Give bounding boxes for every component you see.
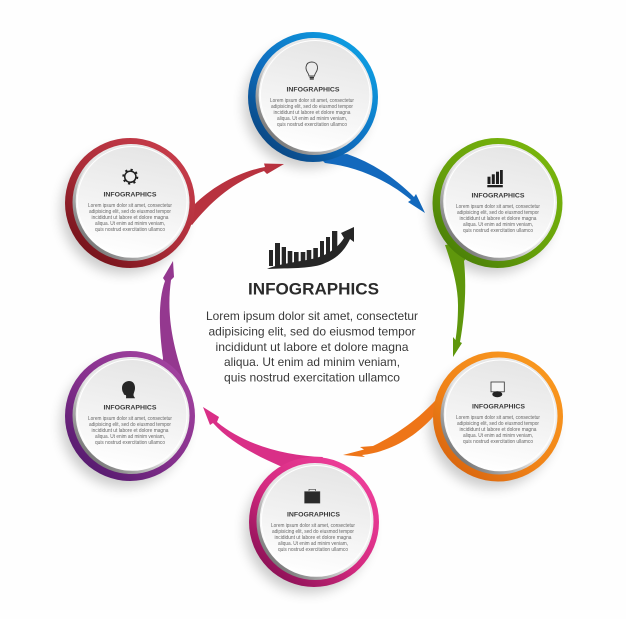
disc face: [260, 464, 373, 577]
disc face: [259, 39, 372, 152]
disc shadow crescent: [72, 144, 190, 261]
panel: blue lightbulb step: [244, 32, 425, 213]
panel: green bars step: [428, 138, 562, 357]
ring: [432, 138, 562, 268]
text block: adipisicing elit, sed do eiusmod tempor: [89, 422, 171, 428]
text block: quis nostrud exercitation ullamco: [95, 440, 165, 446]
text block: quis nostrud exercitation ullamco: [224, 370, 400, 384]
disc highlight arc: [77, 360, 187, 469]
text block: incididunt ut labore et dolore magna: [460, 427, 537, 433]
text block: quis nostrud exercitation ullamco: [463, 439, 533, 445]
text block: aliqua. Ut enim ad minim veniam,: [95, 221, 165, 227]
ring: [65, 351, 195, 481]
text block: quis nostrud exercitation ullamco: [95, 227, 165, 233]
text block: adipisicing elit, sed do eiusmod tempor: [208, 324, 416, 338]
disc face: [443, 145, 556, 258]
disc shadow crescent: [256, 38, 372, 155]
text block: aliqua. Ut enim ad minim veniam,: [463, 222, 533, 228]
arrow: green to orange: [445, 240, 480, 357]
arrow: blue to green: [318, 154, 425, 213]
disc highlight arc: [260, 41, 370, 150]
arrow: red to blue: [175, 164, 284, 225]
text block: incididunt ut labore et dolore magna: [216, 340, 409, 354]
text block: adipisicing elit, sed do eiusmod tempor: [272, 529, 354, 535]
disc shadow crescent: [72, 357, 190, 474]
arrow: pink to purple: [203, 407, 323, 475]
text block: [270, 98, 354, 128]
disc shadow crescent: [440, 358, 558, 474]
disc face: [444, 358, 557, 471]
panel: red gear step: [61, 138, 284, 274]
text block: incididunt ut labore et dolore magna: [274, 535, 352, 541]
panel: orange monitor step: [343, 352, 563, 488]
text block: Lorem ipsum dolor sit amet, consectetur: [88, 416, 172, 422]
icon: bar chart: [487, 170, 503, 187]
ring: [65, 138, 195, 268]
disc face: [76, 145, 189, 258]
arrow: purple to red: [160, 261, 187, 387]
icon: briefcase: [304, 489, 320, 503]
panel: pink briefcase step: [203, 407, 379, 593]
ring: [433, 352, 563, 482]
icon: gear: [123, 170, 137, 184]
text block: [456, 204, 540, 234]
text block: adipisicing elit, sed do eiusmod tempor: [89, 209, 171, 215]
text block: adipisicing elit, sed do eiusmod tempor: [271, 104, 353, 110]
text block: incididunt ut labore et dolore magna: [92, 215, 169, 221]
text block: [271, 523, 355, 553]
heading: INFOGRAPHICS: [286, 86, 340, 94]
text block: aliqua. Ut enim ad minim veniam,: [463, 433, 533, 439]
heading: INFOGRAPHICS: [472, 404, 526, 410]
heading: INFOGRAPHICS: [104, 192, 157, 198]
text block: [88, 416, 172, 446]
text block: Lorem ipsum dolor sit amet, consectetur: [270, 98, 354, 104]
text block: Lorem ipsum dolor sit amet, consectetur: [271, 523, 355, 529]
text block: adipisicing elit, sed do eiusmod tempor: [457, 421, 539, 427]
icon: head silhouette: [122, 381, 135, 398]
text block: quis nostrud exercitation ullamco: [277, 122, 347, 128]
heading: INFOGRAPHICS: [104, 404, 157, 412]
text block: Lorem ipsum dolor sit amet, consectetur: [88, 203, 172, 209]
text block: Lorem ipsum dolor sit amet, consectetur: [456, 204, 540, 210]
text block: incididunt ut labore et dolore magna: [460, 216, 537, 222]
text block: [456, 415, 540, 445]
ring: [249, 457, 379, 587]
text block: Lorem ipsum dolor sit amet, consectetur: [206, 309, 418, 323]
ring: [248, 32, 378, 162]
text block: aliqua. Ut enim ad minim veniam,: [224, 355, 400, 369]
icon: monitor: [491, 382, 504, 397]
disc highlight arc: [261, 466, 371, 575]
text block: aliqua. Ut enim ad minim veniam,: [277, 116, 347, 122]
disc highlight arc: [77, 146, 187, 256]
text block: adipisicing elit, sed do eiusmod tempor: [457, 210, 539, 216]
text block: aliqua. Ut enim ad minim veniam,: [95, 434, 165, 440]
text block: aliqua. Ut enim ad minim veniam,: [278, 541, 348, 547]
text block: incididunt ut labore et dolore magna: [92, 428, 169, 434]
arrow: orange to pink: [343, 393, 450, 457]
disc highlight arc: [445, 360, 555, 470]
heading: INFOGRAPHICS: [287, 512, 341, 518]
disc shadow crescent: [256, 463, 374, 580]
text block: quis nostrud exercitation ullamco: [463, 228, 533, 234]
text block: quis nostrud exercitation ullamco: [278, 547, 348, 553]
text block: [88, 203, 172, 233]
text block: Lorem ipsum dolor sit amet, consectetur: [456, 415, 540, 421]
icon: rising bar chart with arrow: [267, 227, 354, 269]
icon: lightbulb: [306, 62, 318, 79]
text block: [206, 309, 418, 384]
disc face: [76, 358, 189, 471]
panel: center: [206, 227, 418, 384]
heading: INFOGRAPHICS: [248, 280, 379, 298]
disc shadow crescent: [440, 144, 557, 261]
text block: incididunt ut labore et dolore magna: [274, 110, 351, 116]
heading: INFOGRAPHICS: [472, 192, 525, 200]
disc highlight arc: [445, 146, 554, 256]
panel: purple head step: [61, 261, 195, 487]
